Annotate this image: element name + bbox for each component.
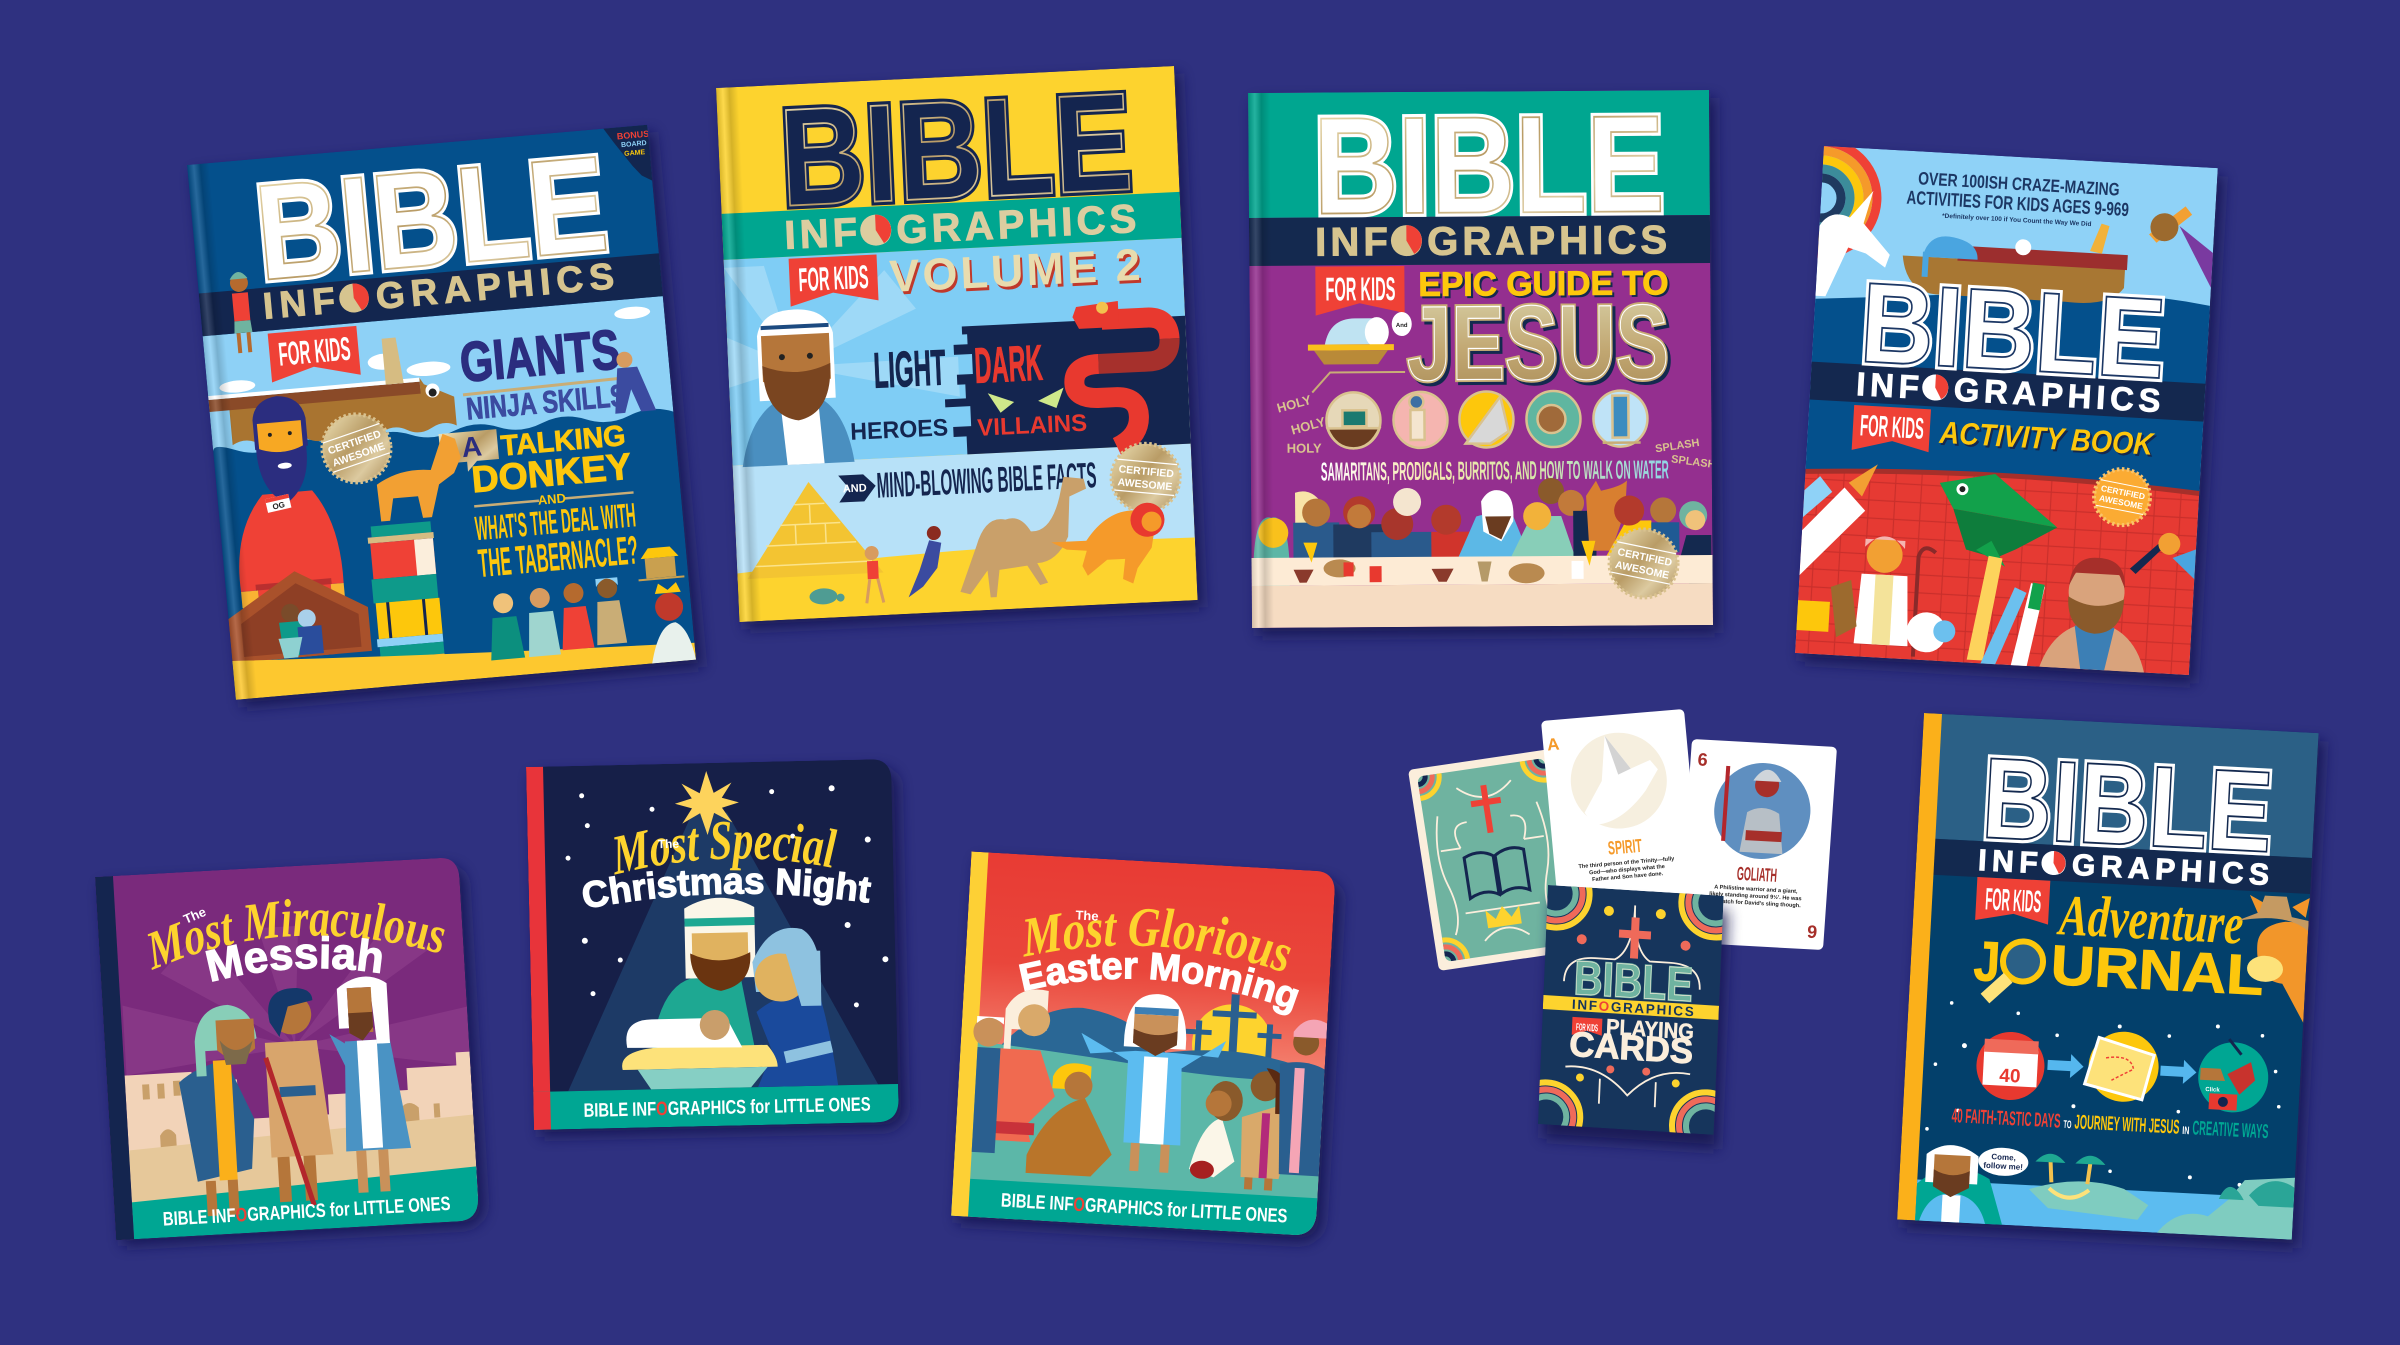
icon: calendar: 40 [1999, 1065, 2021, 1088]
seal: certified awesome [319, 412, 393, 485]
title: Christmas Night: Christmas Night [582, 868, 872, 908]
figure: kneeling person [1026, 1061, 1117, 1178]
book: Activity Book [1739, 139, 2224, 683]
hills [987, 1003, 1327, 1121]
tagline: 40 FAITH-TASTIC DAYS [1951, 1105, 2061, 1133]
flag: for kids: FOR KIDS [1325, 270, 1396, 308]
figure: Jesus [1915, 1143, 2006, 1225]
spine shading [716, 87, 761, 622]
figure: ninja [615, 352, 656, 414]
title: INFOGRAPHICS: INFOGRAPHICS [1977, 844, 2270, 892]
speech bubble: come follow me [1978, 1147, 2029, 1177]
group of people [485, 577, 628, 660]
text: heroes: HEROES [850, 414, 949, 446]
seal: certified awesome: CERTIFIED [1616, 546, 1674, 569]
illustration: markers [1966, 555, 2046, 669]
script title: Most Miraculous: Most Miraculous [148, 898, 445, 970]
illustration: lamb in manger [1308, 312, 1412, 365]
vine pattern [1429, 776, 1561, 946]
arrow [2047, 1053, 2084, 1079]
text: splash splash: SPLASH [1654, 437, 1700, 455]
text: activities for kids: ACTIVITIES FOR KIDS AGES 9-969 [1906, 188, 2129, 221]
figure: right edge person [1274, 1018, 1327, 1176]
tagline: IN [2182, 1125, 2190, 1137]
book: Adventure Journal: FOR KIDS [1984, 881, 2042, 919]
tagline: TO [2063, 1119, 2072, 1131]
icon: pie chart O [1391, 225, 1422, 256]
figure: Mary [752, 927, 838, 1087]
seal: certified awesome: AWESOME [2098, 493, 2144, 511]
figures: runners [864, 526, 944, 603]
illustration: brick wall [1795, 464, 2200, 675]
badge: and [838, 474, 876, 503]
starfield [1923, 1000, 2285, 1189]
spine [526, 767, 551, 1130]
corner badge: bonus board game: BOARD [621, 140, 647, 149]
flag: for kids [1572, 1017, 1602, 1037]
illustration: donkey [376, 434, 461, 522]
icon: star [674, 770, 740, 836]
text: goliath description: A Philistine warrior and a giant, [1714, 884, 1798, 895]
text: activity book: ACTIVITY BOOK [1940, 417, 2158, 464]
panel: dark villains section [942, 316, 1191, 455]
book: Bible Infographics for Kids: WHAT'S THE DEAL WITH [474, 496, 637, 548]
book: Most Glorious Easter Morning [951, 852, 1346, 1248]
water [1915, 1179, 2294, 1240]
rainbow corners [1392, 733, 1598, 987]
figure: disciple left [175, 1003, 267, 1217]
playing card: spirit [1541, 709, 1703, 926]
rainbow corners [1511, 857, 1751, 1163]
title: BIBLE [782, 90, 1133, 210]
illustration: stable with nativity [225, 565, 372, 663]
title: JESUS: JESUS [1406, 283, 1669, 403]
title: JESUS: JESUS [1409, 286, 1672, 406]
icon: pie chart O [1922, 374, 1949, 401]
title: volume 2: VOLUME 2 [890, 242, 1143, 305]
text: holy holy holy: HOLY [1275, 392, 1313, 416]
illustration: five round scenes [1326, 390, 1648, 449]
illustration: dove [1567, 729, 1671, 832]
arrow [2160, 1059, 2197, 1084]
text: epic guide to: EPIC GUIDE TO [1418, 264, 1669, 304]
illustration: Noah's ark [204, 333, 457, 450]
illustration: connector line [1312, 372, 1405, 393]
icon: pie chart O [860, 214, 892, 246]
figure: king [652, 582, 696, 664]
icon: map [2084, 1030, 2160, 1104]
seal: certified awesome [2092, 468, 2152, 527]
script title: Most Glorious: Most Glorious [1024, 908, 1291, 971]
speech bubble: A [438, 429, 500, 474]
icon: pie chart O [339, 284, 369, 312]
band: bottom teal [131, 1166, 479, 1239]
seal: certified awesome [1609, 529, 1678, 598]
illustration: stack of books [368, 521, 444, 656]
text: holy holy holy: HOLY [1287, 441, 1322, 456]
book: Volume 2 [716, 62, 1203, 629]
title: BIBLE: BIBLE [777, 64, 1135, 236]
light rays [724, 266, 960, 396]
town windows [142, 1066, 442, 1160]
title: BIBLE: BIBLE [250, 127, 613, 309]
title: Messiah: Messiah [205, 936, 382, 982]
title: Easter Morning: Easter Morning [1018, 952, 1300, 1016]
seal: certified awesome: CERTIFIED [2100, 483, 2146, 501]
text: holy holy holy [1275, 392, 1328, 456]
illustration: origami frog [1935, 471, 2060, 569]
book: Bible Infographics for Kids [187, 122, 703, 708]
figure: Noah [239, 396, 345, 660]
text: goliath description: no match for David's sling though. [1709, 898, 1801, 909]
playing cards deck box [1511, 857, 1751, 1163]
book: Adventure Journal [1897, 713, 2325, 1248]
book: Activity Book: FOR KIDS [1859, 409, 1925, 446]
card value: nine: 9 [1806, 922, 1818, 942]
illustration: hand with pencil [2146, 204, 2216, 288]
text: series name: BIBLE INFOGRAPHICS for LITTLE ONES [583, 1094, 871, 1122]
text: goliath description: likely standing around 9½'. He was [1709, 890, 1802, 902]
spine [1897, 713, 1942, 1220]
title: BIBLE [256, 152, 610, 284]
title: BIBLE: BIBLE [1979, 734, 2276, 877]
ground [232, 642, 696, 700]
vine pattern with dots [1559, 901, 1703, 1110]
card value: ace: A [1546, 735, 1560, 755]
seal: certified awesome: AWESOME [331, 441, 387, 470]
flag: for kids [1315, 266, 1405, 316]
book: Adventure Journal: CREATIVE WAYS [2192, 1117, 2269, 1143]
title: JESUS: JESUS [1406, 283, 1669, 403]
text: SAMARITANS, PRODIGALS, BURRITOS, AND HOW TO WALK ON WATER [1321, 454, 1669, 487]
spine [951, 852, 988, 1217]
illustration: lamb in manger: And [1396, 323, 1408, 329]
title: BIBLE: BIBLE [1979, 734, 2276, 877]
title: JOURNAL [1972, 929, 2265, 1007]
title: INFOGRAPHICS: INFOGRAPHICS [1855, 365, 2162, 419]
light cone [562, 809, 878, 1091]
text: goliath description [1709, 884, 1802, 909]
script title: Most Special: Most Special [614, 822, 838, 875]
illustration: baby in manger [621, 1009, 778, 1090]
text: cards: CARDS [1569, 1025, 1694, 1071]
text: spirit description: God—who displays what the [1589, 864, 1665, 876]
text: spirit description [1578, 856, 1677, 884]
book: Bible Infographics for Kids: THE TABERNACLE? [476, 528, 640, 586]
title: JOURNAL: J [1972, 929, 2002, 993]
illustration: turtle [809, 587, 845, 605]
text: The: The [181, 904, 208, 927]
spine shading [187, 163, 258, 700]
speech bubble: A: A [460, 431, 483, 463]
book: Epic Guide to Jesus [1248, 87, 1719, 636]
text: The: The [1075, 907, 1099, 924]
band: bottom teal [533, 1084, 899, 1130]
title: JOURNAL: URNAL [2049, 933, 2265, 1007]
text: and [474, 491, 634, 508]
seal: certified awesome: AWESOME [1117, 476, 1173, 493]
spine shading [1248, 93, 1274, 628]
illustration: rainbow [1762, 139, 1880, 257]
flag: for kids: FOR KIDS [277, 330, 352, 373]
icon: open book [1464, 846, 1530, 899]
flag: for kids [1975, 877, 2050, 925]
flag: for kids [789, 254, 879, 307]
icon: magnifying glass [1985, 940, 2044, 1001]
text: holy holy holy: HOLY [1289, 414, 1327, 438]
figure: seated child [1188, 1079, 1244, 1181]
corner badge: bonus board game: GAME [624, 149, 646, 158]
small stars [564, 784, 889, 1014]
spine [95, 876, 134, 1240]
figure: Moses [736, 307, 855, 467]
icon: cross [1468, 783, 1505, 835]
seal: certified awesome: CERTIFIED [1118, 463, 1175, 480]
text: giants: GIANTS [457, 317, 622, 394]
title: INFOGRAPHICS: INFOGRAPHICS [1315, 218, 1667, 265]
figure: Joseph [647, 897, 758, 1064]
script title: Adventure: Adventure [2056, 882, 2245, 957]
illustration: unicorn [1815, 188, 1893, 300]
icon: crown [1485, 904, 1522, 928]
tagline: JOURNEY WITH JESUS [2074, 1111, 2180, 1139]
playing card: goliath: GOLIATH [1736, 864, 1778, 887]
plants [2157, 1171, 2295, 1240]
icon: activities [2196, 1038, 2270, 1114]
figure: standing woman [1238, 1067, 1295, 1192]
figure: child drawing [2039, 526, 2197, 675]
illustration: sun and crosses [1183, 992, 1284, 1087]
text: talking: TALKING [499, 420, 627, 463]
figure: Jesus [326, 974, 414, 1194]
title: volume 2: VOLUME 2 [888, 239, 1141, 302]
text: donkey: DONKEY [470, 446, 633, 500]
title: BIBLE: BIBLE [1857, 259, 2169, 403]
title: BIBLE: BIBLE [1313, 87, 1665, 244]
text: playing: PLAYING [1606, 1014, 1694, 1044]
title: spirit: SPIRIT [1607, 836, 1643, 860]
illustration: glue bottle [1799, 460, 1878, 579]
illustration: table [1251, 540, 1713, 628]
town [124, 1052, 477, 1201]
spine base [533, 1092, 551, 1130]
island with hammock [2028, 1153, 2151, 1220]
flag: for kids [1852, 405, 1931, 454]
flag: for kids [268, 326, 361, 382]
text: and: AND [537, 490, 567, 508]
band: bottom teal [951, 1178, 1317, 1236]
flag: for kids: FOR KIDS [798, 258, 869, 298]
text: ninja skills: NINJA SKILLS [465, 378, 627, 427]
corner badge: bonus board game [603, 125, 653, 184]
title: BIBLE: BIBLE [777, 64, 1135, 236]
text: series name: BIBLE INFOGRAPHICS for LITTLE ONES [1000, 1190, 1288, 1228]
title: BIBLE: BIBLE [1857, 259, 2169, 403]
band: infographics [1543, 995, 1719, 1021]
illustration: roman soldier [229, 271, 254, 353]
figure: Jesus [1074, 990, 1229, 1176]
clouds [215, 305, 654, 394]
illustration: lion [1050, 502, 1167, 587]
illustration: hand with tag [1796, 577, 1859, 638]
title: BIBLE: BIBLE [1313, 87, 1665, 244]
text: epic guide to: EPIC GUIDE TO [1420, 266, 1671, 306]
ground [128, 1114, 478, 1215]
book: Volume 2: MIND-BLOWING BIBLE FACTS [876, 454, 1097, 506]
text: over 100ish: OVER 100ISH CRAZE-MAZING [1918, 168, 2120, 200]
title: BIBLE: BIBLE [1573, 952, 1694, 1012]
text: spirit description: The third person of the Trinity—fully [1578, 856, 1675, 870]
speech bubble: come follow me: Come, [1991, 1152, 2016, 1162]
title: INFOGRAPHICS: INFOGRAPHICS [784, 197, 1137, 258]
seal: certified awesome [1110, 442, 1181, 513]
title: BIBLE: BIBLE [250, 127, 613, 309]
seal: certified awesome: CERTIFIED [327, 429, 383, 457]
title: INFOGRAPHICS: INFOGRAPHICS [261, 255, 616, 327]
illustration: ark with elephant [1901, 213, 2130, 305]
speech bubble: come follow me: follow me! [1983, 1161, 2023, 1172]
book: Most Miraculous Messiah [95, 858, 490, 1252]
figure: healed man [262, 986, 336, 1208]
text: spirit description: Father and Son have done. [1592, 871, 1664, 883]
illustration: camel [956, 476, 1091, 599]
text: The: The [658, 837, 680, 851]
playing card: pattern back [1392, 733, 1598, 987]
illustration: ark of covenant [636, 545, 684, 580]
illustration: donkey with hat [2230, 894, 2310, 1023]
tagline [1951, 1105, 2269, 1143]
illustration: last supper crowd [1253, 477, 1712, 613]
illustration: pyramid [744, 479, 884, 579]
light rays [118, 917, 470, 1085]
card value: six: 6 [1697, 749, 1708, 770]
icon: calendar [1975, 1030, 2046, 1102]
divider: giant spear [463, 377, 628, 395]
text: splash splash [1654, 437, 1716, 472]
ground [737, 537, 1198, 622]
text: villains: VILLAINS [977, 410, 1088, 442]
title: BIBLE: BIBLE [1573, 952, 1694, 1012]
seal: certified awesome: AWESOME [1614, 559, 1670, 582]
badge: and: AND [843, 482, 867, 495]
icon: cross [1618, 917, 1652, 960]
flag: for kids: FOR KIDS [1576, 1022, 1598, 1034]
corner badge: bonus board game: BONUS [616, 129, 650, 141]
illustration: villain eyes [988, 388, 1065, 413]
band: infographics: INFOGRAPHICS [1572, 997, 1694, 1019]
icon: activities: Click [2205, 1087, 2220, 1094]
text: footnote: *Definitely over 100 if You Count the Way We Did [1942, 213, 2092, 228]
book: Volume 2: LIGHT [872, 339, 947, 399]
ground [951, 1039, 1325, 1236]
icon: pie chart O [2041, 850, 2066, 876]
figure: left edge person [967, 1016, 1004, 1153]
book: Most Special Christmas Night [526, 760, 912, 1142]
figure: red robed woman [988, 987, 1061, 1143]
book: Volume 2: DARK [973, 335, 1044, 394]
figure: Noah: OG [272, 500, 286, 512]
text: splash splash: SPLASH [1670, 453, 1716, 471]
illustration: goliath [1711, 760, 1814, 862]
figure: shepherd with lamb [1853, 535, 1960, 659]
text: activity book: ACTIVITY BOOK [1938, 415, 2156, 462]
illustration: serpent [1071, 299, 1174, 449]
text: series name: BIBLE INFOGRAPHICS for LITTLE ONES [162, 1193, 451, 1231]
playing card: goliath [1678, 739, 1837, 950]
